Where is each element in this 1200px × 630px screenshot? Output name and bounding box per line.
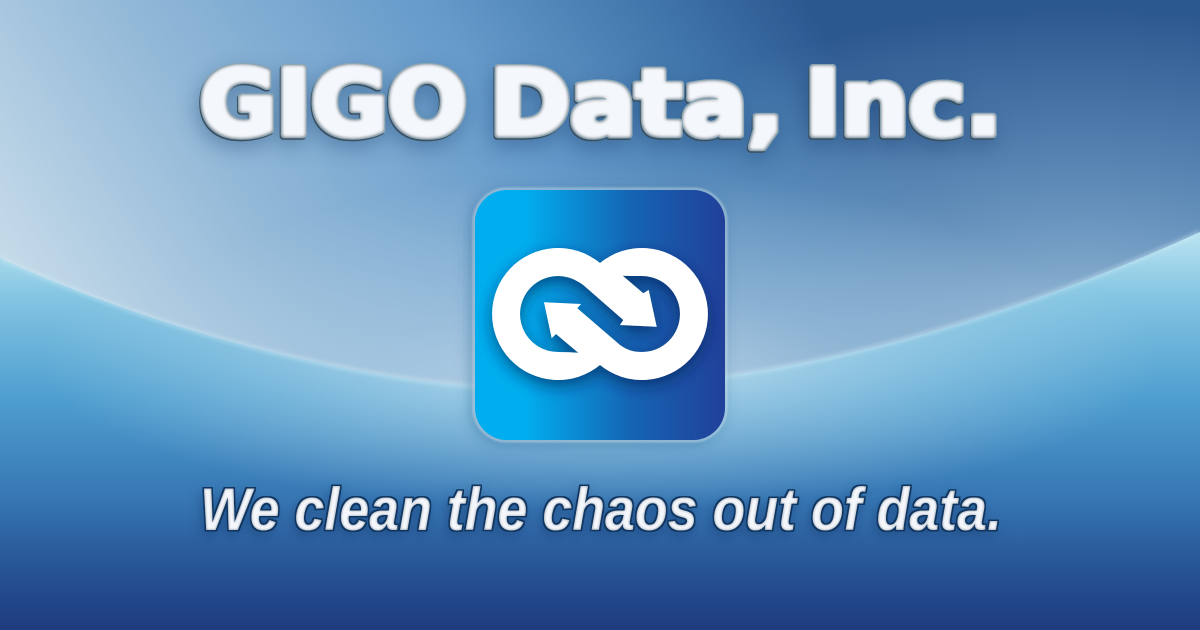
- title: Data,: [490, 51, 784, 156]
- logo: app tile with infinity arrows: [472, 189, 726, 442]
- title: GIGO: [200, 51, 467, 156]
- icon: infinity loop with two arrows: [492, 248, 708, 380]
- tile: [475, 190, 725, 440]
- tile glow edge: [474, 189, 726, 441]
- tile shadow: [472, 192, 722, 442]
- tagline: We clean the chaos out of data.: [200, 476, 1002, 543]
- title: Inc.: [805, 51, 1002, 156]
- title: [200, 51, 1002, 156]
